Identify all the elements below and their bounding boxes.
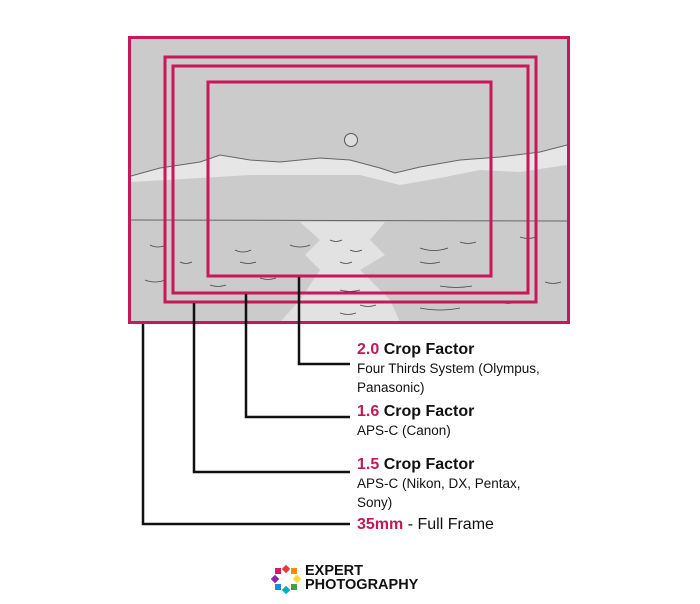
logo text: EXPERT: [305, 563, 363, 579]
label: 1.5 crop factor: APS-C (Nikon, DX, Pentax,: [357, 476, 521, 491]
label: 1.6 crop factor: 1.6 Crop Factor: [357, 403, 474, 420]
scene background: [128, 36, 570, 324]
frame: 1.5 crop: [165, 57, 536, 302]
label: 35mm full frame: 35mm - Full Frame: [357, 516, 494, 533]
label: 2.0 crop factor: [357, 341, 540, 395]
label: 1.5 crop factor: [357, 456, 521, 510]
label: 2.0 crop factor: Four Thirds System (Olympus,: [357, 361, 540, 376]
leader lines: [143, 277, 350, 524]
frame: 1.6 crop: [173, 66, 528, 293]
label: 1.6 crop factor: [357, 403, 474, 438]
frame: 35mm full frame: [130, 38, 568, 322]
logo icon: [271, 565, 301, 594]
label: 1.5 crop factor: Sony): [357, 495, 392, 510]
label: 2.0 crop factor: 2.0 Crop Factor: [357, 341, 474, 358]
label: 2.0 crop factor: Panasonic): [357, 380, 425, 395]
frame: 2.0 crop: [208, 82, 491, 276]
logo text: PHOTOGRAPHY: [305, 577, 418, 593]
logo text: [305, 563, 418, 593]
label: 1.5 crop factor: 1.5 Crop Factor: [357, 456, 474, 473]
label: 1.6 crop factor: APS-C (Canon): [357, 423, 451, 438]
